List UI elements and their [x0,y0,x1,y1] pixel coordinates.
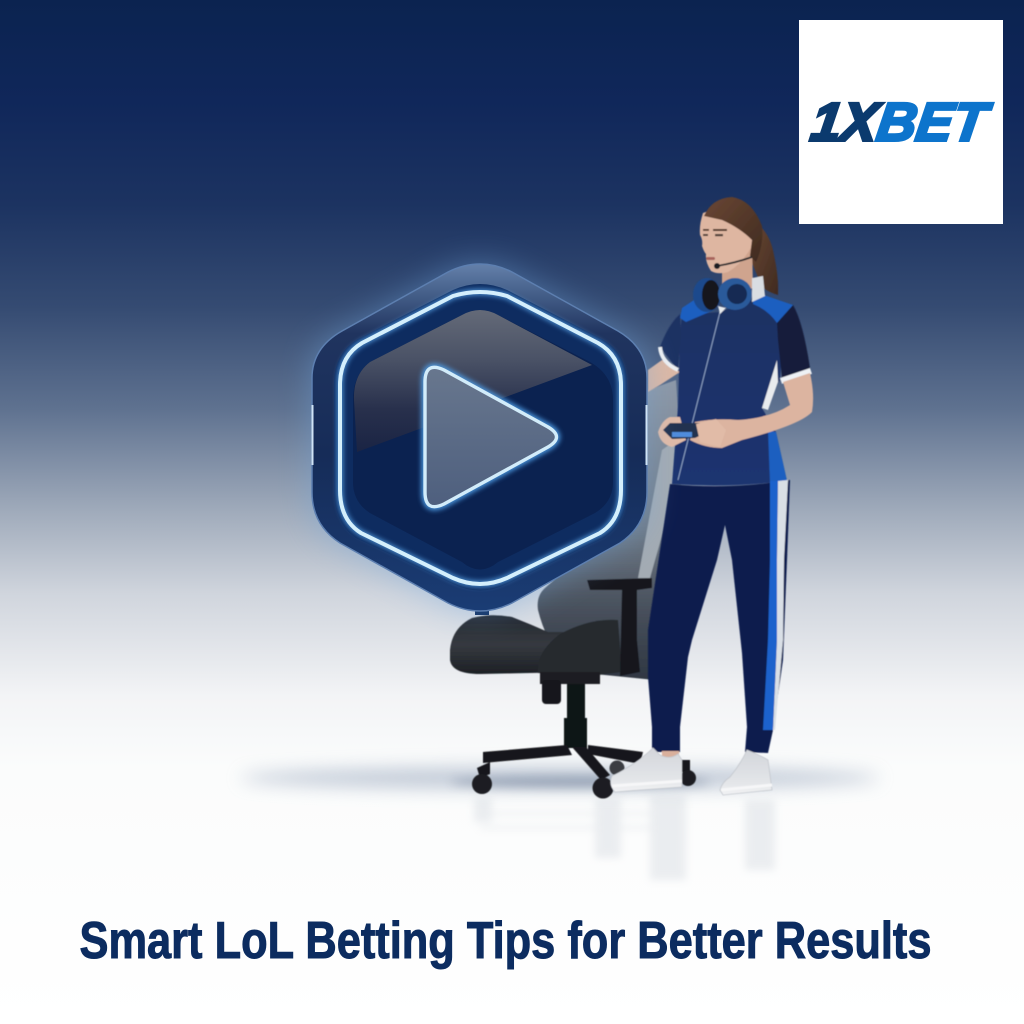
badge inner band [334,284,627,590]
shirt body [672,300,787,485]
shirt raglan shoulder left [680,298,714,322]
shirt white side panel [762,360,778,410]
eyes, brows and lips [703,229,727,260]
earphone cable [678,312,720,480]
caster front [592,778,614,798]
headset microphone [714,257,752,269]
badge edge highlights [312,405,646,465]
caster rear [610,760,624,776]
fingers over controller [696,419,726,447]
floor shadow and reflection [240,767,880,880]
ponytail [750,222,778,295]
left ankle [662,751,679,759]
neck [722,245,753,300]
play triangle glow [425,367,556,507]
neon ring glow [340,292,621,584]
hexagon play badge [312,264,647,615]
left sneaker [611,748,682,792]
caster right [680,770,696,786]
tilt lever [542,680,561,704]
hair top [704,197,762,262]
glass highlight [354,310,592,452]
headphones [693,276,765,314]
caster left [472,774,492,794]
badge stem [475,605,489,615]
chair backrest [538,380,682,680]
left hand [658,417,686,447]
left arm behind [648,360,680,392]
logo wordmark dark: 1X [807,93,884,152]
face [700,205,756,273]
chair armrest [538,620,622,676]
badge outer glow [312,264,647,611]
jogger trousers [648,480,790,753]
right sleeve cuff [781,371,811,381]
play triangle [425,367,556,507]
seat bracket [540,672,600,684]
right sleeve [777,305,810,378]
chair seat [450,615,590,674]
shirt blue side panel [768,430,787,483]
game controller [663,423,712,439]
inner panel [353,310,613,570]
woman gamer [611,197,813,795]
right sneaker [720,750,772,795]
trouser stripe white [773,480,788,730]
star base [477,745,690,780]
gas lift [564,684,587,748]
left sleeve cuff [660,347,678,370]
trouser stripe blue [763,481,778,730]
logo panel [799,20,1003,224]
left sleeve [660,314,681,370]
logo wordmark blue: BET [873,93,995,152]
right arm [690,373,813,448]
chair side bolster [638,440,676,578]
shirt raglan shoulder right [753,293,793,323]
chair arm pad and post [587,578,652,676]
chair [450,380,696,798]
badge outer frame [312,264,647,611]
neon ring [340,292,621,584]
